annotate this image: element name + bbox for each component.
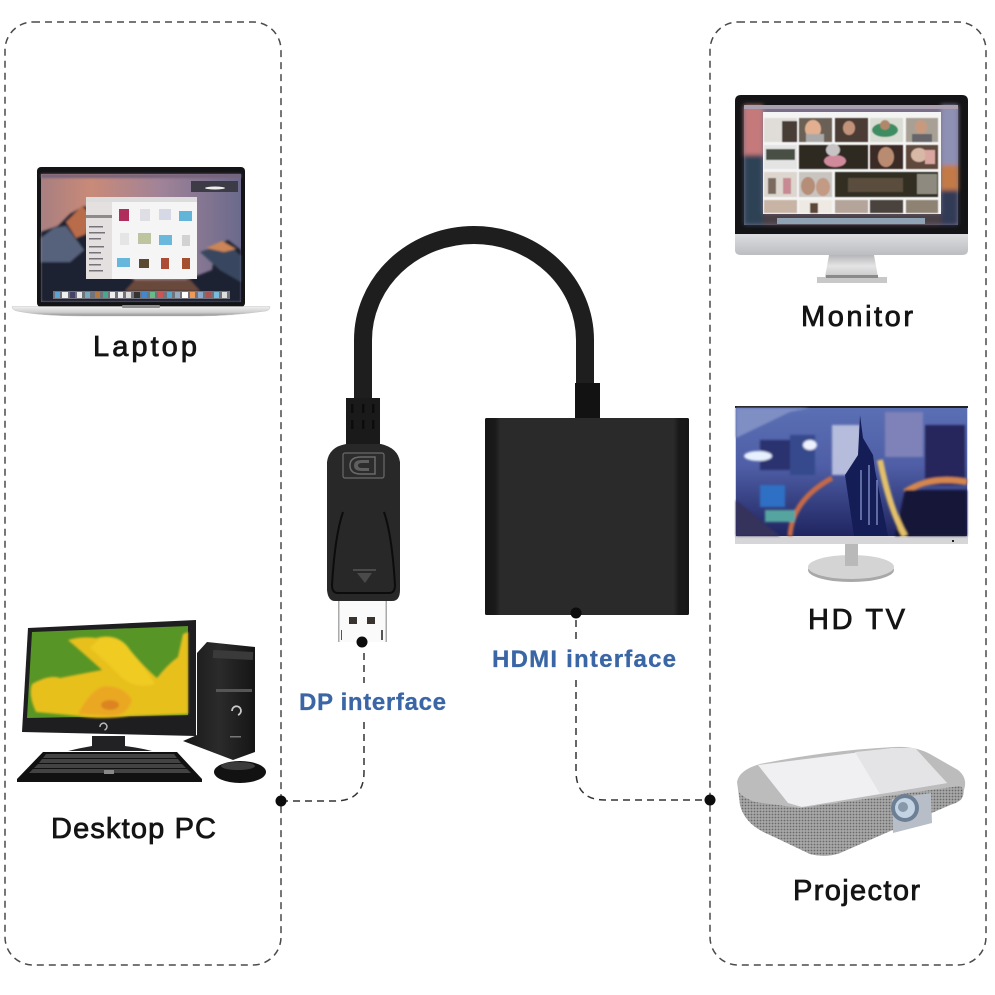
label: Projector: Projector <box>793 875 920 907</box>
power light <box>952 540 954 542</box>
laptop screen <box>41 174 241 302</box>
stand <box>68 736 152 751</box>
monitor frame <box>22 620 196 736</box>
HDMI dashes upper <box>575 620 577 640</box>
label: Laptop: Laptop <box>93 331 197 363</box>
DP dot <box>356 636 368 648</box>
projector body <box>737 747 965 856</box>
HDMI cable neck <box>575 383 600 419</box>
panel: display devices <box>710 22 986 965</box>
audio widget <box>191 181 238 192</box>
HDMI end dot <box>704 794 716 806</box>
connector: DP line <box>276 636 368 806</box>
HDMI dashes lower <box>576 680 710 800</box>
adapter cable <box>363 235 585 402</box>
screen <box>744 105 958 225</box>
icon: laptop <box>12 167 270 316</box>
stand <box>808 543 894 582</box>
label: Desktop PC: Desktop PC <box>51 813 216 845</box>
icon: monitor <box>735 95 968 283</box>
mouse <box>214 761 266 783</box>
HDMI dot <box>570 608 582 618</box>
contacts <box>338 600 387 642</box>
DP dashes upper <box>363 653 365 683</box>
screen <box>736 408 967 536</box>
panel: source devices <box>5 22 281 965</box>
label: HD TV: HD TV <box>808 604 906 636</box>
stand <box>817 255 887 283</box>
icon: HD TV <box>735 406 968 582</box>
HDMI box <box>485 418 689 615</box>
label: HDMI interface: HDMI interface <box>492 646 676 673</box>
strain relief <box>346 398 380 448</box>
PC tower <box>183 642 255 760</box>
dock <box>53 291 230 299</box>
monitor screen <box>27 626 188 718</box>
icon: desktop PC <box>17 620 266 783</box>
plug body <box>327 444 400 601</box>
top plate <box>758 748 947 807</box>
speaker mesh <box>739 786 964 856</box>
DP end dot <box>276 796 286 806</box>
label: DP interface: DP interface <box>299 689 446 716</box>
monitor logo <box>100 723 107 730</box>
photo window <box>763 112 941 214</box>
bezel <box>735 406 968 544</box>
latch arrow <box>353 569 376 583</box>
DP dashes lower <box>281 722 364 801</box>
chin <box>735 233 968 255</box>
label: Monitor: Monitor <box>801 301 913 333</box>
latch <box>332 512 395 593</box>
keyboard <box>17 752 202 782</box>
DP connector <box>327 398 400 642</box>
laptop base <box>12 306 270 316</box>
DP logo <box>343 453 384 478</box>
dock <box>777 218 925 224</box>
finder window <box>86 197 197 279</box>
bezel <box>735 95 968 234</box>
connector: HDMI line <box>570 608 716 806</box>
laptop lid <box>37 167 245 307</box>
lens <box>891 793 932 833</box>
icon: projector <box>737 747 965 856</box>
